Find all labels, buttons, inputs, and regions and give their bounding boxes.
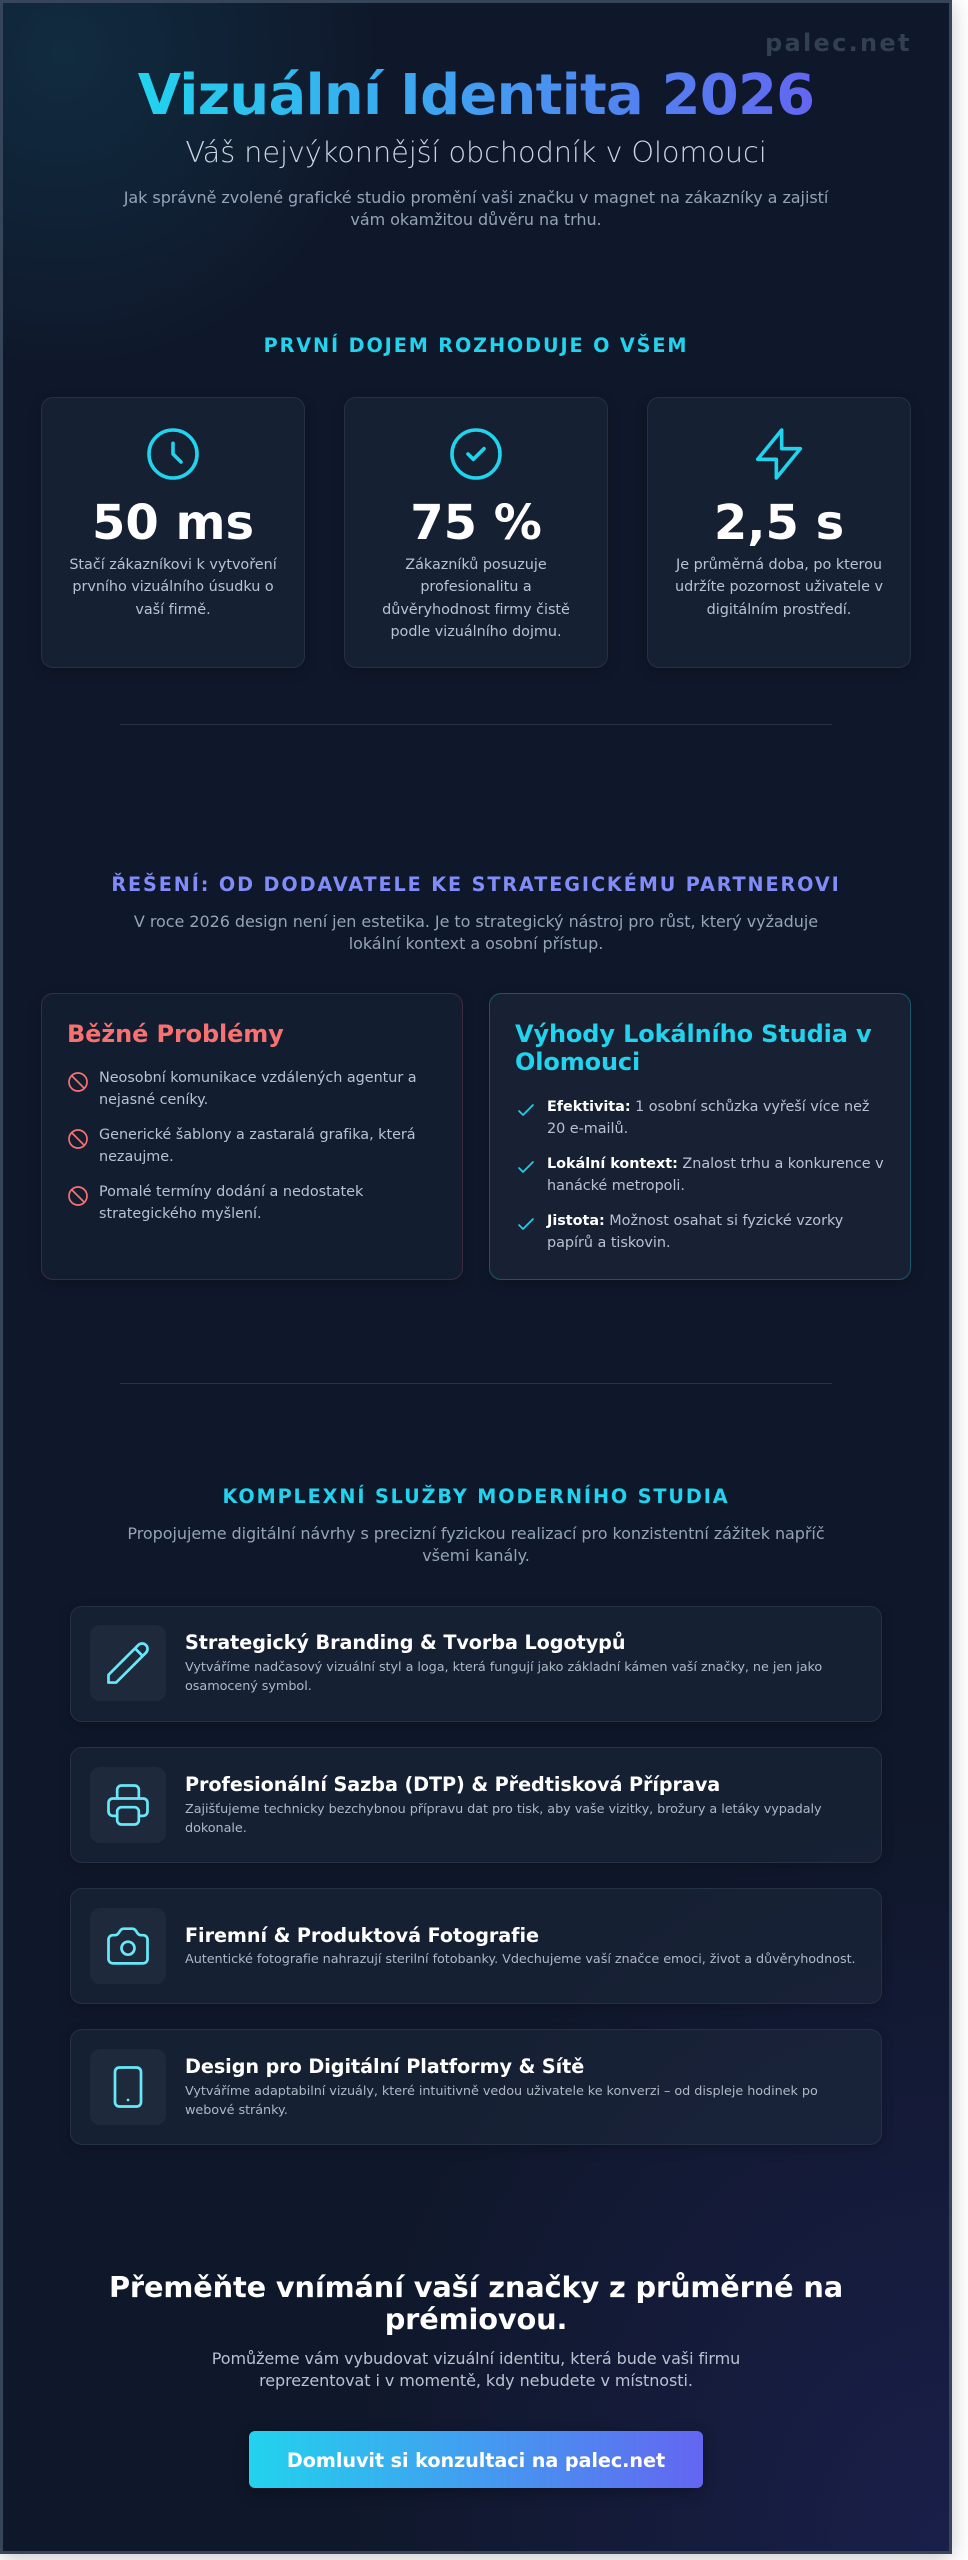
stat description: prvního vizuálního úsudku o xyxy=(72,579,274,595)
call to action text: Pomůžeme vám vybudovat vizuální identitu, která bude vaši firmu xyxy=(212,2349,740,2368)
stat description: udržíte pozornost uživatele v xyxy=(675,579,883,595)
problem 2 xyxy=(99,1127,416,1165)
benefit 1: Efektivita: 1 osobní schůzka vyřeší více než xyxy=(547,1099,869,1115)
call to action heading xyxy=(109,2270,843,2336)
call to action button: Domluvit si konzultaci na palec.net xyxy=(287,2449,665,2472)
service title: Profesionální Sazba (DTP) & Předtisková Příprava xyxy=(185,1773,720,1796)
benefit 1 xyxy=(547,1098,869,1137)
services intro text: Propojujeme digitální návrhy s precizní fyzickou realizací pro konzistentní zážitek napříč xyxy=(127,1524,825,1543)
stat description: důvěryhodnost firmy čistě xyxy=(382,602,570,618)
icon: ban 3 xyxy=(68,1186,88,1206)
service description: osamocený symbol. xyxy=(185,1679,312,1694)
stat description xyxy=(69,557,277,618)
stat description: vaší firmě. xyxy=(135,602,211,618)
problem 2: nezaujme. xyxy=(99,1149,174,1165)
icon: check 3 xyxy=(518,1218,534,1230)
service description xyxy=(185,1660,822,1694)
panel: service photography xyxy=(70,1888,882,2004)
panel: stat 50 ms xyxy=(41,397,305,668)
stat description: digitálním prostředí. xyxy=(707,602,851,618)
heading: first impression: PRVNÍ DOJEM ROZHODUJE O VŠEM xyxy=(264,334,688,357)
intro text: vám okamžitou důvěru na trhu. xyxy=(350,210,602,229)
solution intro text: V roce 2026 design není jen estetika. Je to strategický nástroj pro růst, který vyžaduje xyxy=(134,912,818,931)
icon: lightning bolt xyxy=(756,428,802,480)
benefit 1: 20 e-mailů. xyxy=(547,1121,628,1137)
call to action text xyxy=(212,2349,740,2390)
benefit 2: Lokální kontext: Znalost trhu a konkurence v xyxy=(547,1156,884,1172)
panel: stat 75 % xyxy=(344,397,608,668)
panel: service digital xyxy=(70,2029,882,2145)
service description xyxy=(185,1802,822,1836)
call to action button xyxy=(249,2431,703,2488)
solution intro text: lokální kontext a osobní přístup. xyxy=(349,934,603,953)
service title: Strategický Branding & Tvorba Logotypů xyxy=(185,1631,625,1654)
stat description: Je průměrná doba, po kterou xyxy=(676,557,882,573)
heading: benefits: Olomouci xyxy=(515,1048,640,1076)
service description: webové stránky. xyxy=(185,2103,288,2118)
icon: ban 1 xyxy=(68,1072,88,1092)
subtitle: Váš nejvýkonnější obchodník v Olomouci xyxy=(185,135,767,169)
call to action heading: Přeměňte vnímání vaší značky z průměrné na xyxy=(109,2270,843,2304)
service description xyxy=(185,2084,818,2118)
icon: check circle xyxy=(450,428,502,480)
service description: Vytváříme adaptabilní vizuály, které intuitivně vedou uživatele ke konverzi – od displeje hodinek po xyxy=(185,2084,818,2099)
call to action text: reprezentovat i v momentě, kdy nebudete v místnosti. xyxy=(259,2371,693,2390)
stat number: 50 ms xyxy=(92,495,254,551)
heading: solution: ŘEŠENÍ: OD DODAVATELE KE STRATEGICKÉMU PARTNEROVI xyxy=(111,873,841,896)
title: Vizuální Identita 2026 xyxy=(138,63,814,128)
icon: printer xyxy=(90,1767,166,1843)
problem 1: Neosobní komunikace vzdálených agentur a xyxy=(99,1070,417,1086)
panel: service DTP xyxy=(70,1747,882,1863)
intro text: Jak správně zvolené grafické studio promění vaši značku v magnet na zákazníky a zajistí xyxy=(124,188,828,207)
problem 1 xyxy=(99,1070,417,1108)
service description: dokonale. xyxy=(185,1821,247,1836)
problem 1: nejasné ceníky. xyxy=(99,1092,208,1108)
stat description xyxy=(382,556,570,640)
problem 3 xyxy=(99,1184,364,1222)
service title: Firemní & Produktová Fotografie xyxy=(185,1924,539,1947)
problem 3: strategického myšlení. xyxy=(99,1206,262,1222)
intro text xyxy=(122,188,829,229)
problem 3: Pomalé termíny dodání a nedostatek xyxy=(99,1184,363,1200)
benefit 3 xyxy=(546,1213,843,1251)
benefit 2 xyxy=(547,1156,884,1194)
stat number: 75 % xyxy=(410,495,542,551)
stat number: 2,5 s xyxy=(714,495,844,551)
heading: services: KOMPLEXNÍ SLUŽBY MODERNÍHO STUDIA xyxy=(222,1485,730,1508)
stat description: profesionalitu a xyxy=(420,579,532,595)
services intro text: všemi kanály. xyxy=(422,1546,530,1565)
stat description xyxy=(675,556,883,618)
problem 2: Generické šablony a zastaralá grafika, která xyxy=(99,1127,416,1143)
icon: pencil xyxy=(90,1625,166,1701)
benefit 2: hanácké metropoli. xyxy=(547,1178,685,1194)
icon: ban 2 xyxy=(68,1129,88,1149)
icon: check 2 xyxy=(518,1161,534,1173)
icon: clock xyxy=(147,428,199,480)
stat description: Zákazníků posuzuje xyxy=(405,557,547,573)
service description: Zajišťujeme technicky bezchybnou přípravu dat pro tisk, aby vaše vizitky, brožury a letáky vypadaly xyxy=(185,1802,822,1817)
watermark: palec.net: palec.net xyxy=(765,29,912,57)
stat description: podle vizuálního dojmu. xyxy=(390,624,562,640)
stat description: Stačí zákazníkovi k vytvoření xyxy=(69,557,277,573)
service title: Design pro Digitální Platformy & Sítě xyxy=(185,2055,584,2078)
panel: local studio benefits xyxy=(489,993,911,1280)
call to action heading: prémiovou. xyxy=(385,2302,567,2336)
heading: benefits: Výhody Lokálního Studia v xyxy=(515,1020,872,1048)
panel: common problems xyxy=(41,993,463,1280)
icon: phone xyxy=(90,2049,166,2125)
benefit 3: Jistota: Možnost osahat si fyzické vzorky xyxy=(547,1213,843,1229)
icon: check 1 xyxy=(518,1104,534,1116)
benefit 3: papírů a tiskovin. xyxy=(547,1235,671,1251)
icon: camera xyxy=(90,1908,166,1984)
solution intro text xyxy=(134,912,818,953)
service description: Vytváříme nadčasový vizuální styl a loga, která fungují jako základní kámen vaší značky, ne jen jako xyxy=(185,1660,822,1675)
panel: service branding xyxy=(70,1606,882,1722)
services intro text xyxy=(127,1524,825,1565)
panel: stat 2,5 s xyxy=(647,397,911,668)
heading: benefits xyxy=(515,1020,872,1076)
heading: problems: Běžné Problémy xyxy=(67,1020,284,1048)
service description: Autentické fotografie nahrazují sterilní fotobanky. Vdechujeme vaší značce emoci, život a důvěryhodnost. xyxy=(185,1952,856,1967)
